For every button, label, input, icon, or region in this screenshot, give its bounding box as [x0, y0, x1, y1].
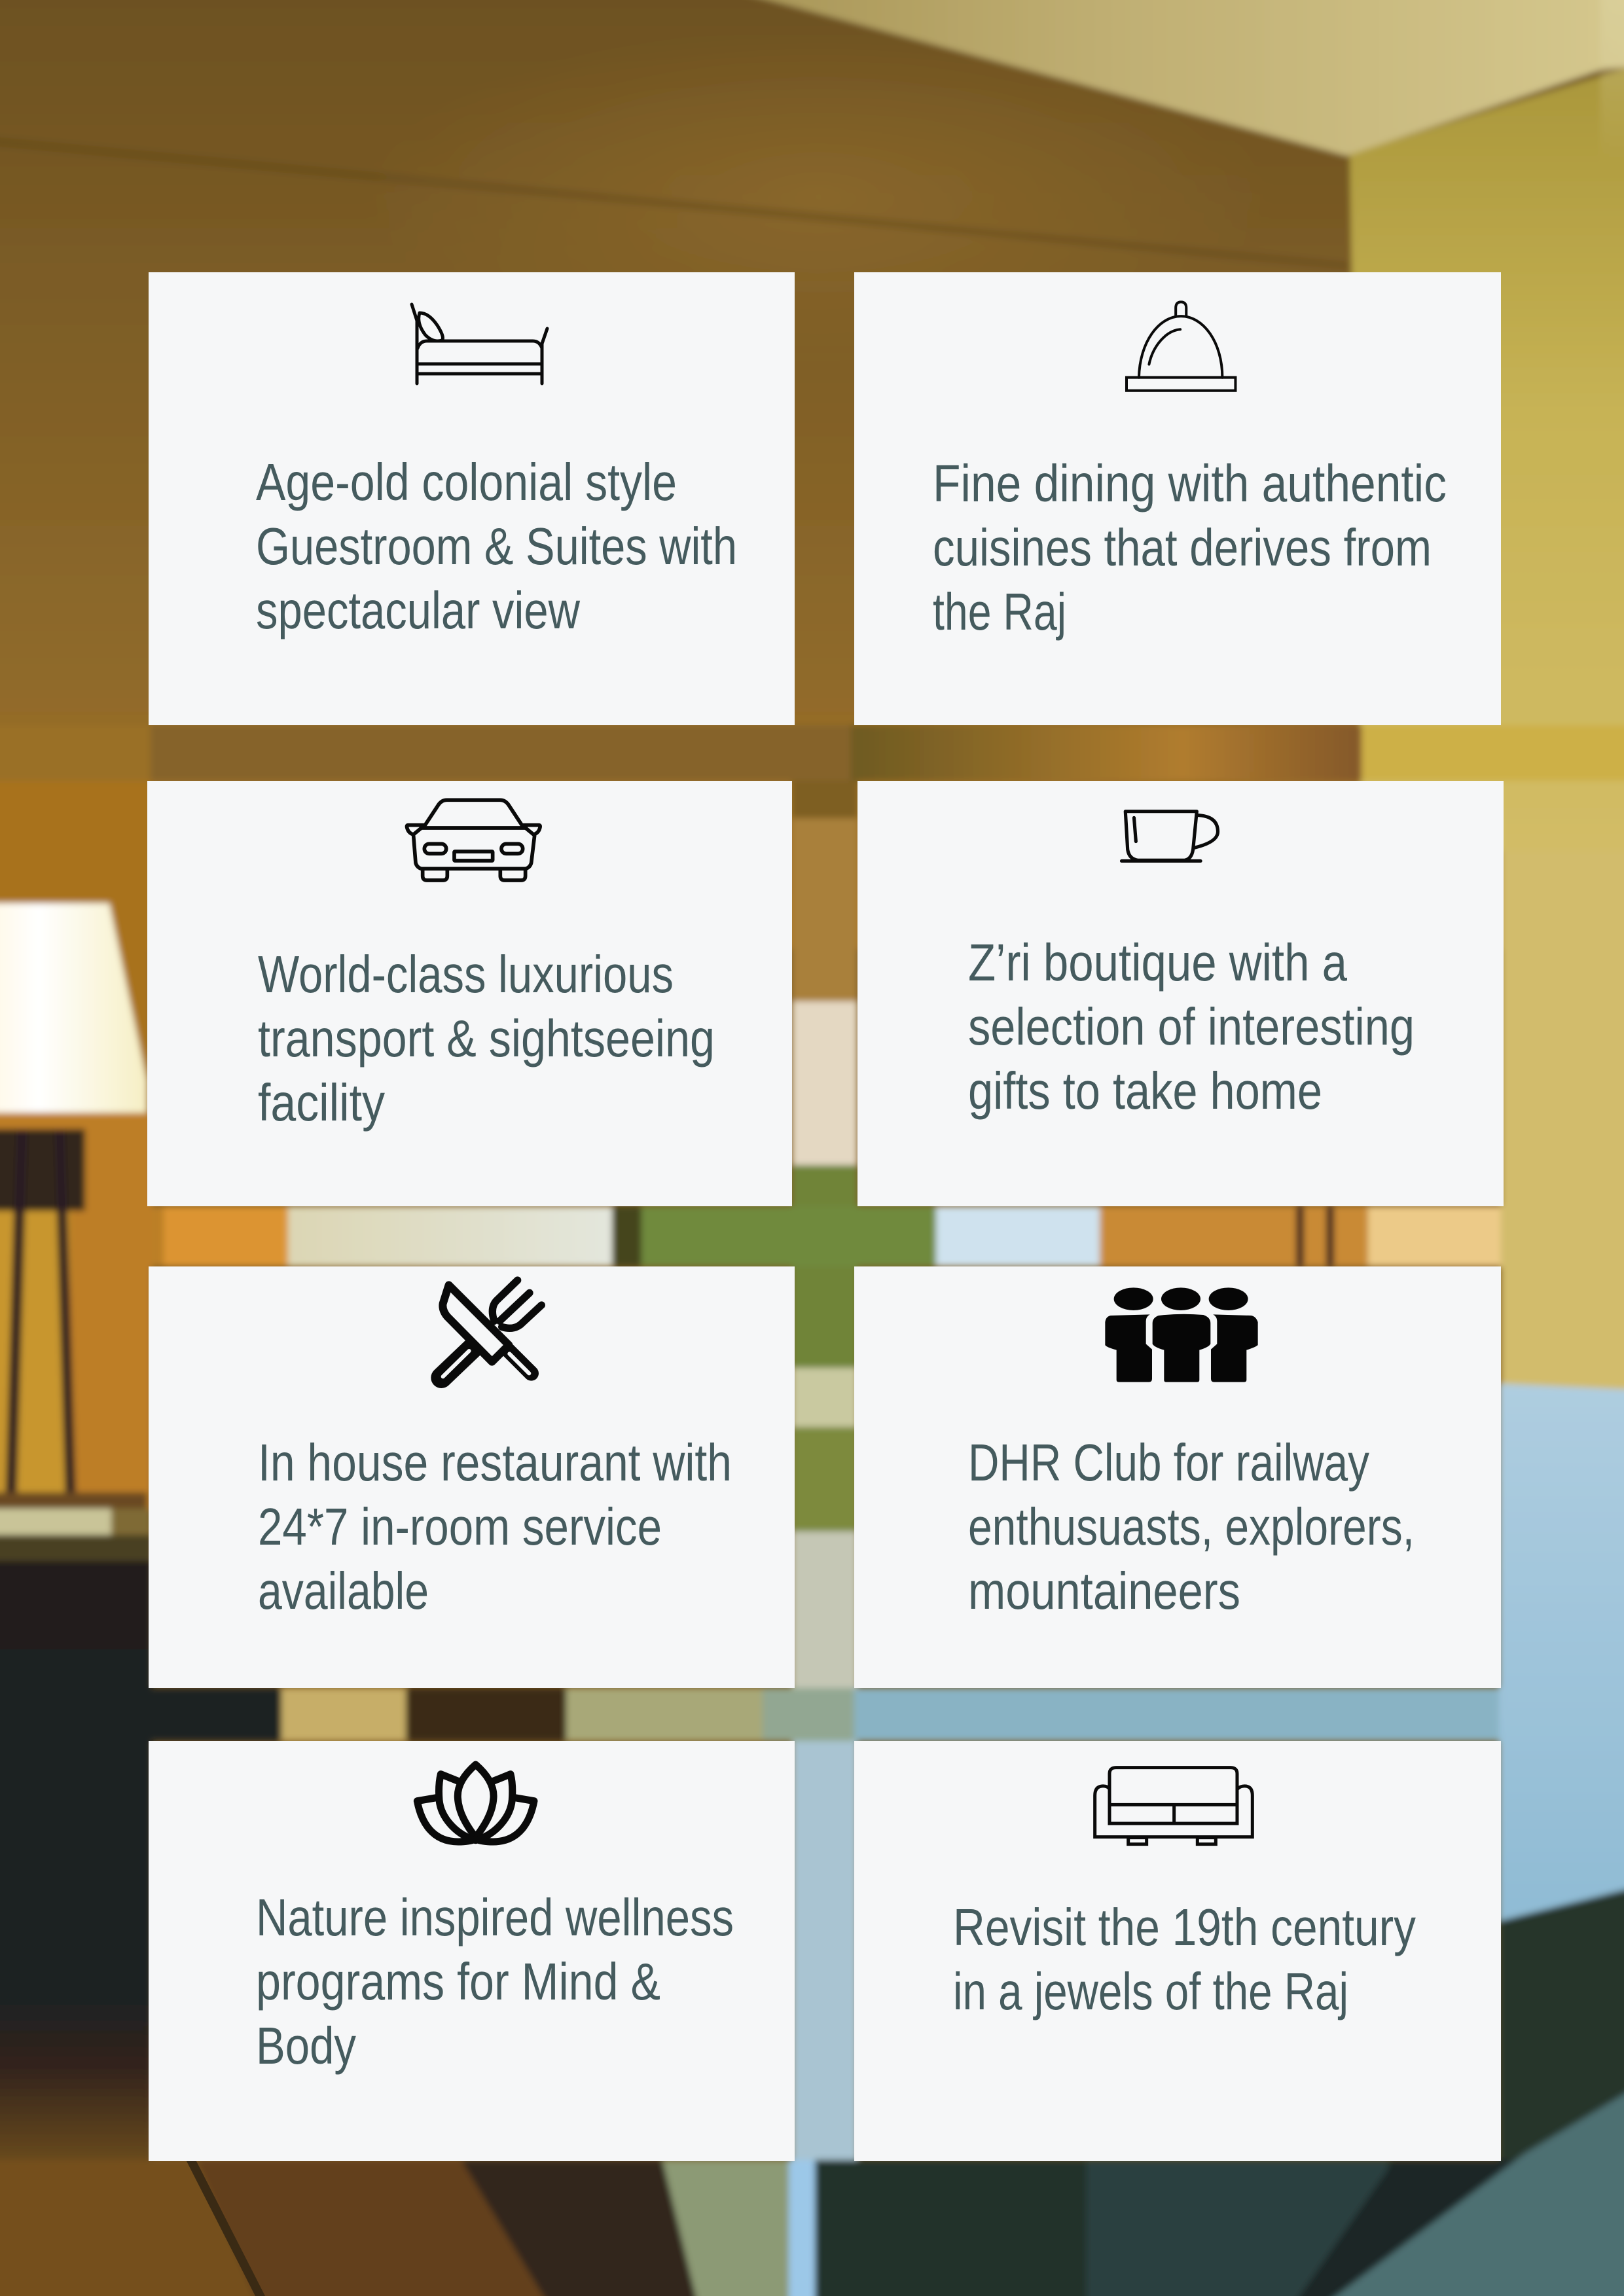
panel: fine dining	[854, 272, 1501, 725]
icon: cloche	[1127, 302, 1235, 391]
panel: restaurant	[149, 1266, 795, 1688]
icon: sofa	[1095, 1768, 1252, 1844]
text: 19th century	[953, 1898, 1416, 2020]
text: fine dining	[933, 454, 1447, 641]
text: guestroom: Guestroom & Suites with	[256, 517, 737, 575]
text: boutique: Z’ri boutique with a	[968, 933, 1347, 992]
panel: wellness	[149, 1741, 795, 2161]
icon: car	[406, 800, 540, 880]
text: transport: World-class luxurious	[258, 945, 674, 1003]
icon: cup	[1122, 812, 1218, 861]
text: 19th century: in a jewels of the Raj	[953, 1962, 1348, 2020]
text: guestroom	[256, 453, 737, 639]
panel: boutique	[857, 781, 1504, 1206]
text: wellness: programs for Mind &	[256, 1952, 660, 2011]
icon: lotus	[417, 1765, 534, 1842]
text: wellness: Body	[256, 2017, 356, 2075]
panel: 19th century	[854, 1741, 1501, 2161]
icon: bed	[412, 304, 547, 384]
text: boutique: gifts to take home	[968, 1062, 1322, 1120]
icon: crossed knife and fork	[441, 1280, 541, 1378]
text: transport	[258, 945, 715, 1132]
text: DHR club: DHR Club for railway	[968, 1433, 1369, 1492]
text: restaurant	[258, 1433, 732, 1620]
text: fine dining: cuisines that derives from	[933, 518, 1432, 577]
text: restaurant: 24*7 in-room service	[258, 1498, 662, 1556]
text: boutique	[968, 933, 1415, 1120]
text: DHR club	[968, 1433, 1415, 1620]
text: guestroom: spectacular view	[256, 581, 580, 639]
text: fine dining: the Raj	[933, 583, 1066, 641]
text: wellness: Nature inspired wellness	[256, 1888, 734, 1946]
icon: three people	[1105, 1287, 1258, 1382]
text: transport: facility	[258, 1073, 385, 1132]
text: DHR club: enthusuasts, explorers,	[968, 1498, 1415, 1556]
panel: DHR club	[854, 1266, 1501, 1688]
text: DHR club: mountaineers	[968, 1562, 1240, 1620]
text: restaurant: available	[258, 1562, 429, 1620]
text: wellness	[256, 1888, 734, 2075]
text: boutique: selection of interesting	[968, 997, 1415, 1056]
text: 19th century: Revisit the 19th century	[953, 1898, 1416, 1956]
text: guestroom: Age-old colonial style	[256, 453, 677, 511]
text: transport: transport & sightseeing	[258, 1009, 715, 1067]
panel: transport	[147, 781, 792, 1206]
text: restaurant: In house restaurant with	[258, 1433, 732, 1492]
panel: guestroom	[149, 272, 795, 725]
text: fine dining: Fine dining with authentic	[933, 454, 1447, 512]
